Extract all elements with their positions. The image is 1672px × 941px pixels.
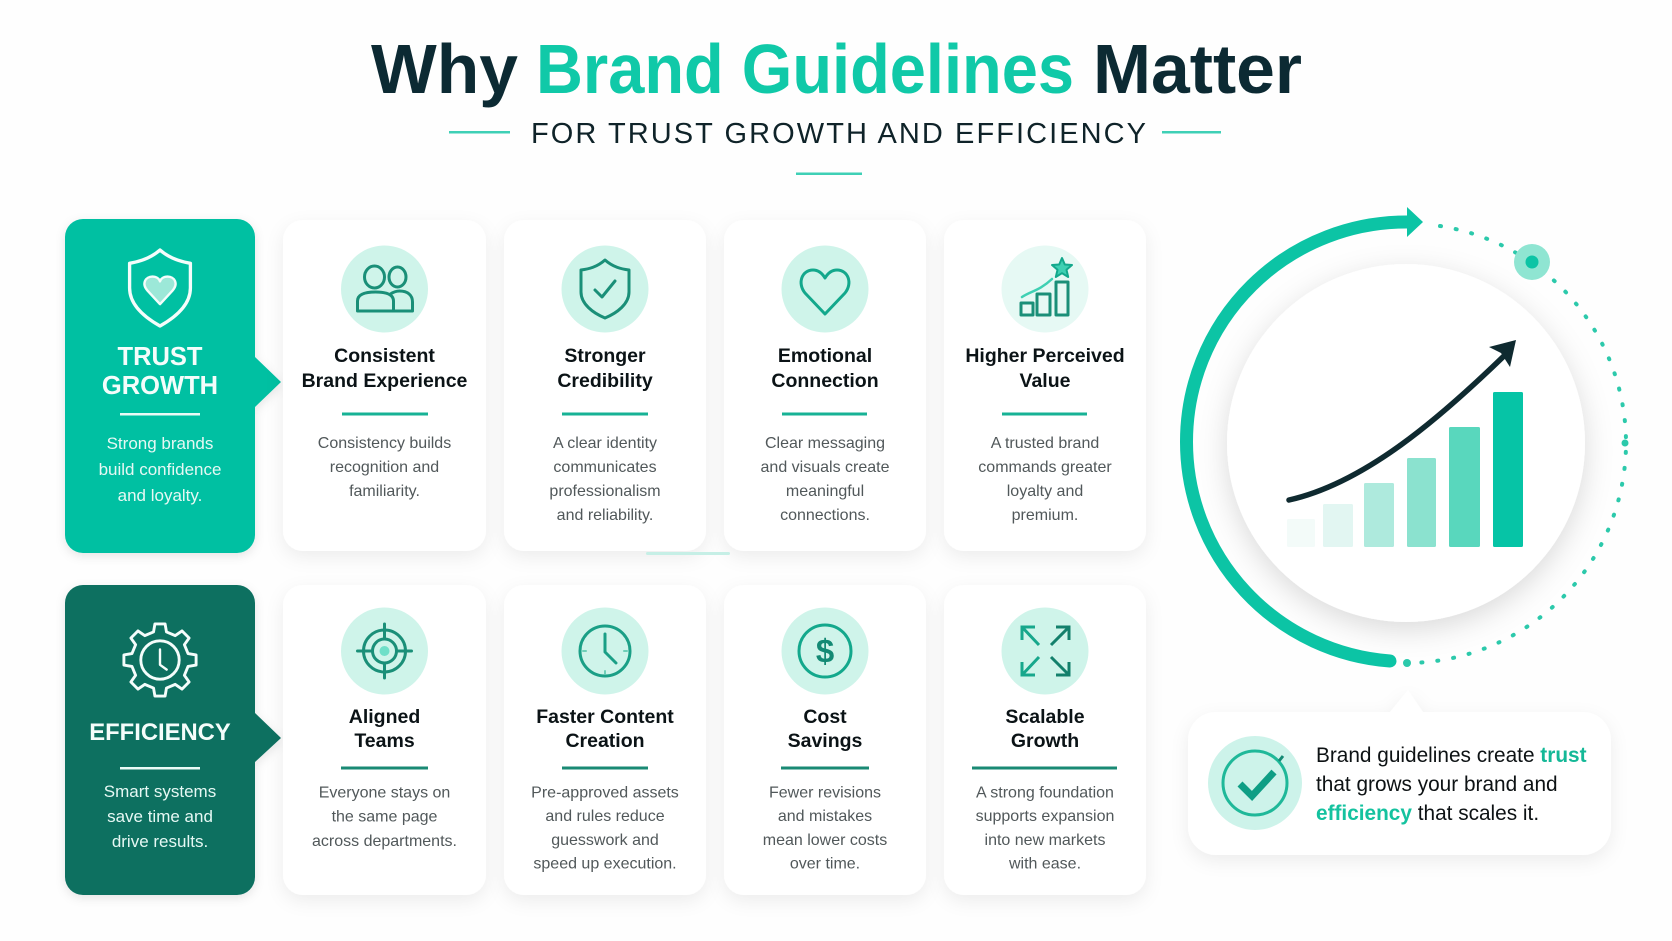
icon: people (341, 246, 428, 332)
card text: across departments. (312, 833, 457, 850)
card text: guesswork and (551, 832, 659, 849)
card text: and rules reduce (545, 808, 665, 825)
card text (763, 784, 887, 872)
icon: target (341, 608, 428, 694)
growth arrow (1289, 340, 1516, 500)
text: trust summary: build confidence (99, 460, 221, 479)
solid progress arc with arrow (1186, 207, 1423, 661)
card title: Value (1020, 370, 1071, 392)
card: stronger credibility (504, 220, 706, 551)
bars (1287, 392, 1523, 547)
card text: familiarity. (349, 483, 420, 500)
card: emotional connection (724, 220, 926, 551)
card text: A clear identity (553, 435, 657, 452)
text: efficiency summary: drive results. (112, 832, 208, 851)
card text: supports expansion (976, 808, 1114, 825)
card text (318, 435, 451, 500)
card text: recognition and (330, 459, 439, 476)
card title: Scalable (1005, 706, 1085, 728)
card text: and reliability. (557, 507, 653, 524)
heading: trust growth: GROWTH (102, 372, 218, 400)
icon: shield check (562, 246, 648, 332)
icon: shield with heart (130, 250, 190, 326)
card title: Brand Experience (302, 370, 468, 392)
icon: dollar coin (782, 608, 868, 694)
text: trust summary (99, 434, 221, 505)
icon: expand arrows (1002, 608, 1088, 694)
card: cost savings (724, 585, 926, 895)
card title (965, 345, 1125, 392)
progress node (1514, 244, 1550, 280)
card title: Growth (1011, 730, 1079, 752)
card title: Stronger (564, 345, 646, 367)
icon: check badge (1208, 736, 1302, 830)
icon: gear with clock (124, 624, 196, 696)
card text (978, 435, 1112, 524)
card title: Cost (803, 706, 847, 728)
card text: Clear messaging (765, 435, 885, 452)
card text (549, 435, 661, 524)
card title: Savings (788, 730, 863, 752)
card text: and visuals create (761, 459, 890, 476)
subtitle: FOR TRUST GROWTH AND EFFICIENCY (531, 118, 1146, 150)
card title (536, 706, 674, 752)
card title: Higher Perceived (965, 345, 1125, 367)
panel: trust growth (65, 219, 281, 553)
card title: Credibility (557, 370, 653, 392)
callout (1188, 690, 1611, 855)
card: faster content creation (504, 585, 706, 895)
card text: speed up execution. (533, 856, 677, 872)
card text: A trusted brand (991, 435, 1099, 452)
card text: premium. (1012, 507, 1078, 524)
text: efficiency summary (104, 782, 216, 851)
card text: Consistency builds (318, 435, 451, 452)
panel: efficiency (65, 585, 281, 895)
card: aligned teams (283, 585, 486, 895)
card text: connections. (780, 507, 870, 524)
card title (557, 345, 653, 392)
card title: Creation (565, 730, 645, 752)
card text: into new markets (985, 832, 1105, 849)
card text: the same page (332, 808, 438, 826)
card text (312, 784, 457, 850)
card title (302, 345, 468, 392)
title (371, 30, 1302, 108)
card text: over time. (790, 856, 860, 872)
card title (349, 706, 420, 752)
card text: professionalism (549, 483, 661, 500)
text: efficiency summary: save time and (107, 807, 213, 826)
heading: trust growth (102, 343, 218, 400)
callout text: that grows your brand and (1316, 773, 1558, 796)
card: higher perceived value (944, 220, 1146, 551)
card text: Everyone stays on (319, 784, 450, 802)
icon: heart (782, 246, 868, 332)
card title: Consistent (334, 345, 435, 367)
card title: Connection (771, 370, 879, 392)
icon: dollar coin: $ (816, 632, 834, 670)
text: efficiency summary: Smart systems (104, 782, 216, 801)
card title (771, 345, 879, 392)
card text: Pre-approved assets (531, 784, 679, 802)
card text: Fewer revisions (769, 784, 881, 802)
card title: Emotional (778, 345, 872, 367)
card text: commands greater (978, 459, 1112, 476)
card title (1005, 706, 1085, 752)
icon: bars and star (1002, 246, 1088, 332)
card text: mean lower costs (763, 832, 887, 849)
card text: with ease. (1008, 856, 1081, 872)
callout text: Brand guidelines create trust (1316, 744, 1587, 767)
card text (531, 784, 679, 872)
card title: Teams (354, 730, 415, 752)
card text: loyalty and (1007, 483, 1083, 500)
title: Why (371, 30, 518, 108)
card text: A strong foundation (976, 784, 1114, 802)
title: Brand Guidelines (536, 30, 1074, 108)
heading: trust growth: TRUST (118, 343, 203, 371)
text: trust summary: and loyalty. (118, 486, 202, 505)
callout text: efficiency that scales it. (1316, 802, 1539, 825)
callout text (1316, 744, 1587, 825)
card text: and mistakes (778, 808, 872, 825)
icon: clock (562, 608, 648, 694)
text: trust summary: Strong brands (107, 434, 213, 453)
dotted progress arc (1407, 226, 1626, 663)
card title (788, 706, 863, 752)
card title: Aligned (349, 706, 420, 728)
card text (761, 435, 890, 524)
card text: meaningful (786, 483, 864, 500)
title: Matter (1093, 30, 1302, 108)
card title: Faster Content (536, 706, 674, 728)
heading: efficiency: EFFICIENCY (89, 719, 231, 746)
card: scalable growth (944, 585, 1146, 895)
card: consistent brand experience (283, 220, 486, 551)
card text (976, 784, 1114, 872)
card text: communicates (553, 459, 657, 476)
chart: growth circle (1186, 207, 1628, 667)
